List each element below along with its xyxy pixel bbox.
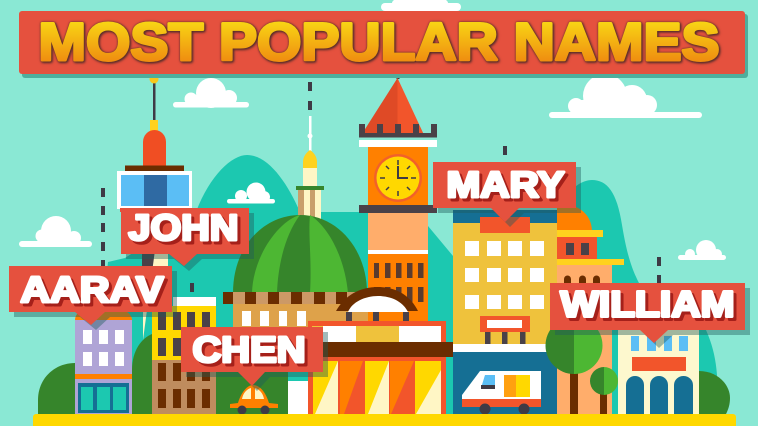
market: [308, 321, 453, 414]
dashed antenna: Mary building: [503, 146, 507, 155]
dome base building: [223, 292, 418, 354]
dashed antenna: William building: [657, 257, 661, 284]
minaret: [296, 116, 324, 220]
label: William: [550, 283, 745, 343]
bush: left: [38, 363, 75, 414]
William building: [618, 330, 699, 414]
title: MOST POPULAR NAMES: [38, 13, 720, 72]
label: Aarav: [9, 266, 172, 325]
green background behind street: [216, 370, 288, 414]
hills: centre teal slope: [428, 226, 453, 414]
dashed antenna: yellow building: [190, 283, 194, 292]
bush: behind yellow building: [132, 334, 152, 414]
name: John: JOHN: [128, 207, 238, 248]
hills: left teal hill: [104, 155, 370, 414]
hills: right teal hill: [560, 180, 717, 414]
label: John: [121, 207, 249, 266]
yellow and brown building: [152, 297, 216, 414]
car: [230, 385, 278, 414]
Mary building: [453, 210, 557, 414]
cloud: left: [19, 216, 92, 247]
dashed antenna: minaret: [308, 82, 312, 110]
name: Chen: CHEN: [192, 329, 306, 370]
cloud: lower right: [678, 240, 726, 260]
market arch: [336, 287, 418, 321]
clock face: [374, 154, 422, 202]
name: William: WILLIAM: [560, 284, 734, 324]
cloud: upper right: [549, 74, 702, 118]
cloud: upper left: [173, 78, 249, 108]
label: Mary: [433, 162, 576, 222]
tree: large: [545, 317, 602, 414]
van: [462, 371, 541, 414]
name: Aarav: AARAV: [20, 269, 164, 310]
tree: small: [590, 367, 618, 414]
title banner: [19, 11, 748, 78]
ground: [33, 414, 736, 426]
dashed antenna: left: [101, 188, 105, 269]
yellow strip: [216, 354, 308, 370]
dome: [233, 215, 367, 293]
cloud: small on hill: [227, 182, 275, 204]
label: Chen: [181, 327, 323, 386]
cloud: top centre: [381, 0, 461, 11]
left tower: [117, 74, 248, 340]
clock tower: [359, 74, 437, 322]
name: Mary: MARY: [446, 164, 564, 205]
white tower base: [288, 381, 308, 414]
bush: right: [699, 371, 730, 414]
orange dome building: [557, 203, 624, 414]
Aarav building: [75, 305, 132, 414]
